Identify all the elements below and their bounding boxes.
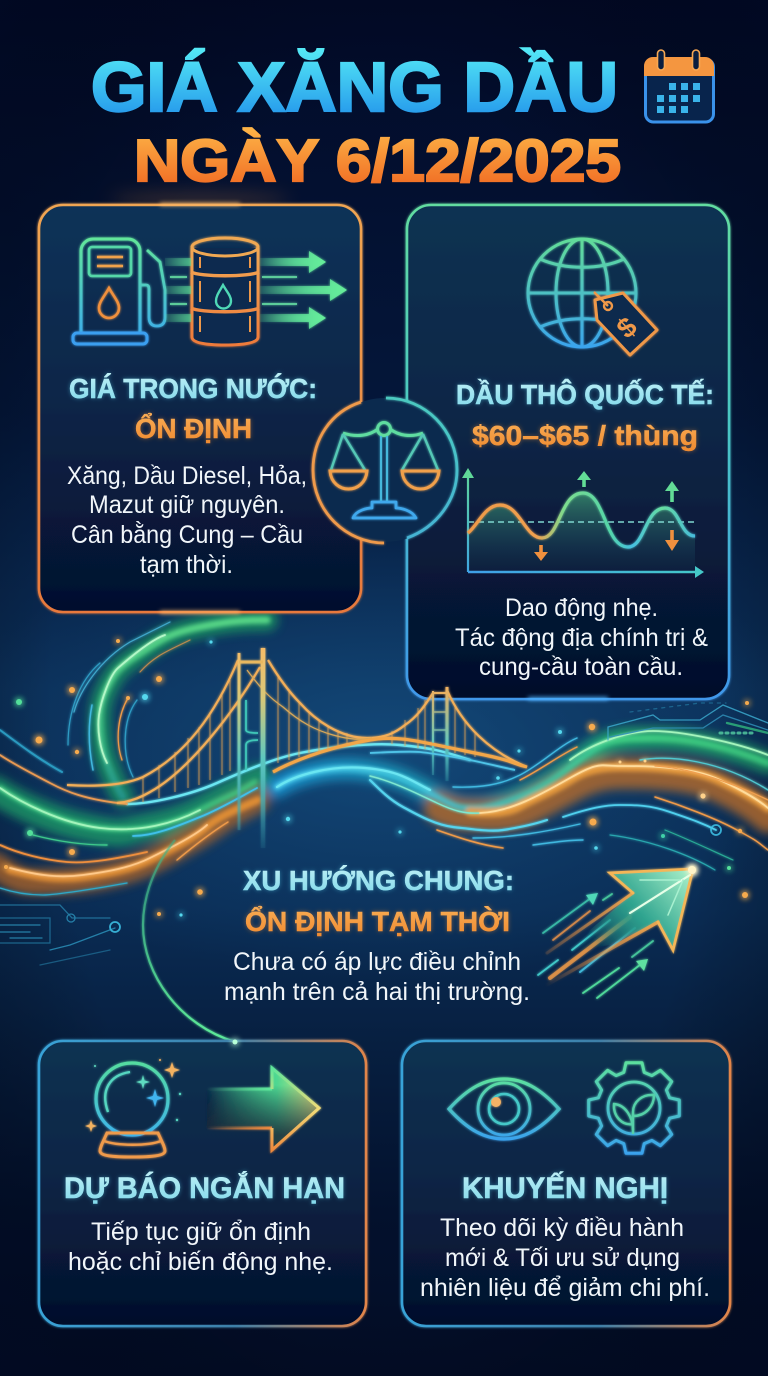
trend section (224, 865, 530, 1006)
golden gate bridge (67, 648, 527, 848)
soft wave bands (0, 620, 768, 882)
heading: forecast: DỰ BÁO NGẮN HẠN (64, 1171, 345, 1205)
border glint (528, 697, 608, 700)
icon: crystal ball (85, 1059, 181, 1157)
body text: domestic: Xăng, Dầu Diesel, Hỏa, (67, 462, 307, 490)
icon: globe with price tag: $ (611, 311, 643, 344)
arrow head (543, 866, 696, 987)
panel: crude oil (407, 205, 729, 700)
trend section: ỔN ĐỊNH TẠM THỜI (245, 906, 510, 937)
balance scale badge (313, 398, 457, 543)
body text: crude oil: cung-cầu toàn cầu. (479, 653, 683, 681)
body text: domestic (67, 462, 307, 579)
icon: fuel pump (73, 239, 165, 344)
particles (4, 639, 749, 917)
body text: forecast: hoặc chỉ biến động nhẹ. (68, 1248, 333, 1276)
trend section: XU HƯỚNG CHUNG: (243, 865, 514, 896)
icon: oil barrel (191, 238, 259, 345)
status: stable: ỔN ĐỊNH (135, 413, 252, 444)
circuit traces (0, 703, 768, 965)
value: price range: $60–$65 / thùng (472, 420, 698, 451)
body text: domestic: Mazut giữ nguyên. (89, 491, 285, 519)
up-right arrow (538, 866, 696, 998)
body text: crude oil: Dao động nhẹ. (505, 594, 658, 622)
panel: domestic price (39, 203, 361, 614)
trend section: mạnh trên cả hai thị trường. (224, 978, 530, 1006)
medium wave bands (0, 620, 768, 878)
panel: short-term forecast (39, 1041, 366, 1326)
body text: recommendation: mới & Tối ưu sử dụng (445, 1244, 680, 1272)
icon: scales (330, 422, 439, 518)
icon: eco gear (589, 1063, 679, 1153)
body text: domestic: Cân bằng Cung – Cầu (71, 520, 303, 549)
body text: recommendation (420, 1214, 710, 1302)
title: NGÀY 6/12/2025 (134, 128, 621, 194)
body text: recommendation: nhiên liệu để giảm chi phí. (420, 1274, 710, 1302)
icon: globe with price tag (528, 239, 657, 355)
body text: crude oil: Tác động địa chính trị & (455, 624, 708, 652)
icon: calendar (644, 50, 714, 122)
flowing energy waves (0, 620, 768, 965)
icon: forward arrow (207, 1068, 319, 1150)
loop side arcs (68, 663, 100, 745)
bright filaments (0, 622, 768, 895)
body text: forecast (68, 1218, 333, 1276)
line chart: oil price (462, 468, 704, 578)
connector curve (143, 840, 235, 1042)
border glints (160, 203, 240, 614)
heading: domestic: GIÁ TRONG NƯỚC: (69, 373, 317, 404)
trend section: Chưa có áp lực điều chỉnh (233, 948, 521, 976)
body text: domestic: tạm thời. (140, 551, 233, 579)
icon: eye (449, 1079, 559, 1139)
title: GIÁ XĂNG DẦU (91, 48, 618, 126)
title (91, 48, 621, 194)
heading: crude oil: DẦU THÔ QUỐC TẾ: (456, 378, 714, 410)
body text: forecast: Tiếp tục giữ ổn định (91, 1218, 311, 1246)
heading: recommendation: KHUYẾN NGHỊ (462, 1171, 668, 1205)
arrow streaks (538, 893, 653, 998)
body text: recommendation: Theo dõi kỳ điều hành (440, 1214, 684, 1242)
body text: crude oil (455, 594, 708, 681)
connector end dot (232, 1040, 238, 1044)
icon: flow arrows (165, 251, 347, 329)
panel: recommendation (402, 1041, 730, 1326)
